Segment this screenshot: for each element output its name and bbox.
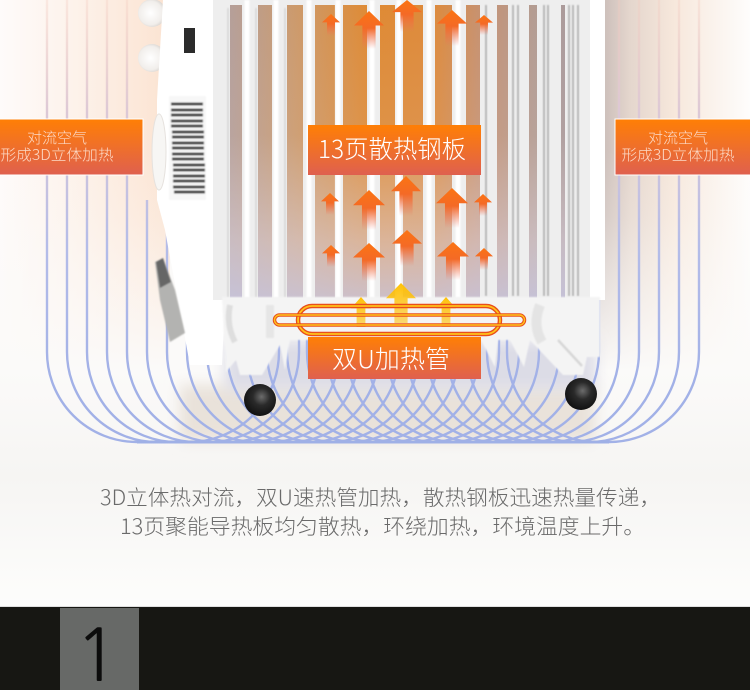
callout: right convection: 形成3D立体加热 xyxy=(622,144,734,165)
description text: 13页聚能导热板均匀散热，环绕加热，环境温度上升。 xyxy=(120,511,645,541)
foot bracket xyxy=(155,258,185,342)
number tab: 1 xyxy=(75,620,119,690)
callout: 13 fins xyxy=(308,125,481,175)
side panel bump xyxy=(152,114,166,190)
fins xyxy=(213,0,590,300)
callout: right convection xyxy=(615,119,750,175)
callout: double U tube xyxy=(308,337,481,379)
radiator heater xyxy=(138,0,605,416)
side panel xyxy=(157,0,225,365)
left wheel xyxy=(244,384,276,416)
callout: left convection: 对流空气 xyxy=(27,127,87,148)
number tab xyxy=(60,608,139,690)
description text: 3D立体热对流，双U速热管加热，散热钢板迅速热量传递， xyxy=(100,482,661,512)
callout: double U tube: 双U加热管 xyxy=(332,340,450,376)
callout: left convection xyxy=(0,119,143,175)
power switch xyxy=(184,28,195,53)
vent grille xyxy=(169,96,206,200)
heat arrows xyxy=(321,0,493,327)
right wheel xyxy=(565,378,597,410)
bottom dark band xyxy=(0,606,750,690)
callout: left convection: 形成3D立体加热 xyxy=(0,144,114,165)
callout: 13 fins: 13页散热钢板 xyxy=(318,130,466,166)
concentric airflow lines xyxy=(47,0,699,442)
fin bottoms xyxy=(222,297,600,375)
description text xyxy=(100,482,661,541)
fin highlights and slits xyxy=(228,0,578,298)
control knobs xyxy=(138,0,166,72)
callout: right convection: 对流空气 xyxy=(648,127,708,148)
heating tube xyxy=(274,306,524,334)
